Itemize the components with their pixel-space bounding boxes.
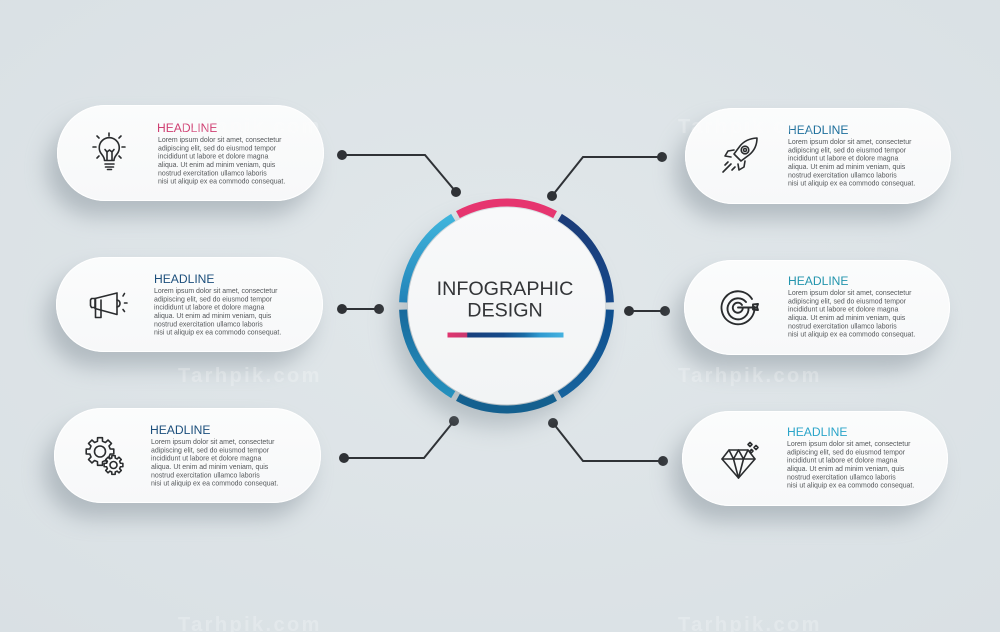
panel: diamond card	[672, 411, 948, 521]
watermarks: Tarhpik.com	[678, 365, 822, 387]
icon: target	[722, 291, 758, 324]
body text: aliqua. Ut enim ad minim veniam, quis	[151, 464, 269, 471]
body text: nostrud exercitation ullamco laboris	[151, 472, 260, 479]
body text: nostrud exercitation ullamco laboris	[787, 474, 896, 481]
icon: diamond	[722, 442, 758, 478]
body text: adipiscing elit, sed do eiusmod tempor	[788, 147, 907, 154]
panel: rocket card	[675, 108, 951, 219]
watermarks: Tarhpik.com	[678, 116, 822, 138]
body text: nostrud exercitation ullamco laboris	[154, 321, 263, 328]
body text: nostrud exercitation ullamco laboris	[788, 323, 897, 330]
body text	[788, 139, 915, 188]
body text: Lorem ipsum dolor sit amet, consectetur	[787, 441, 911, 448]
connector: middle right	[624, 306, 670, 316]
panel: gears card	[44, 408, 321, 518]
body text: adipiscing elit, sed do eiusmod tempor	[787, 449, 906, 456]
body text: Lorem ipsum dolor sit amet, consectetur	[154, 288, 278, 295]
panel: center circle	[393, 202, 610, 426]
panel: megaphone card	[46, 257, 323, 367]
body text: aliqua. Ut enim ad minim veniam, quis	[158, 162, 276, 169]
body text: adipiscing elit, sed do eiusmod tempor	[788, 298, 907, 305]
body text: Lorem ipsum dolor sit amet, consectetur	[788, 139, 912, 146]
center title: INFOGRAPHIC	[437, 278, 573, 300]
body text	[158, 137, 285, 186]
body text	[788, 290, 915, 339]
headline: HEADLINE	[150, 423, 210, 437]
body text: aliqua. Ut enim ad minim veniam, quis	[154, 313, 272, 320]
body text	[787, 441, 914, 490]
headline: HEADLINE	[157, 121, 218, 135]
body text: aliqua. Ut enim ad minim veniam, quis	[788, 164, 906, 171]
connector: bottom left	[339, 416, 459, 463]
body text: nostrud exercitation ullamco laboris	[158, 170, 267, 177]
body text: aliqua. Ut enim ad minim veniam, quis	[787, 466, 905, 473]
panel: target card	[674, 260, 950, 370]
connector: middle left	[337, 304, 384, 314]
ring segments	[403, 202, 610, 410]
body text: incididunt ut labore et dolore magna	[788, 156, 898, 163]
watermarks	[178, 116, 822, 632]
body text: nostrud exercitation ullamco laboris	[788, 172, 897, 179]
body text: adipiscing elit, sed do eiusmod tempor	[151, 447, 270, 454]
icon: rocket	[723, 138, 757, 172]
body text: nisi ut aliquip ex ea commodo consequat.	[158, 179, 285, 186]
body text: adipiscing elit, sed do eiusmod tempor	[154, 296, 273, 303]
body text: nisi ut aliquip ex ea commodo consequat.	[151, 481, 278, 488]
icon: light bulb	[93, 133, 125, 170]
headline: HEADLINE	[154, 272, 214, 286]
body text: Lorem ipsum dolor sit amet, consectetur	[158, 137, 282, 144]
center multicolor bar	[448, 332, 564, 338]
connector: top left	[337, 150, 461, 197]
connector: top right	[547, 152, 667, 201]
headline: HEADLINE	[788, 274, 848, 288]
body text: Lorem ipsum dolor sit amet, consectetur	[151, 439, 275, 446]
panel: center circle: DESIGN	[467, 300, 543, 322]
icon: gears	[86, 438, 123, 474]
connector: bottom right	[548, 418, 668, 466]
body text	[151, 439, 278, 488]
body text: nisi ut aliquip ex ea commodo consequat.	[788, 332, 915, 339]
panel: lightbulb card	[47, 105, 324, 216]
body text: nisi ut aliquip ex ea commodo consequat.	[154, 330, 281, 337]
body text: incididunt ut labore et dolore magna	[788, 307, 898, 314]
body text: incididunt ut labore et dolore magna	[158, 154, 268, 161]
body text: incididunt ut labore et dolore magna	[787, 458, 897, 465]
body text: nisi ut aliquip ex ea commodo consequat.	[788, 181, 915, 188]
icon: megaphone	[90, 293, 127, 318]
headline: HEADLINE	[787, 425, 848, 439]
body text: aliqua. Ut enim ad minim veniam, quis	[788, 315, 906, 322]
watermarks: Tarhpik.com	[178, 116, 322, 138]
body text: adipiscing elit, sed do eiusmod tempor	[158, 145, 277, 152]
body text: incididunt ut labore et dolore magna	[154, 305, 264, 312]
watermarks: Tarhpik.com	[178, 365, 322, 387]
headline: HEADLINE	[788, 123, 848, 137]
body text: Lorem ipsum dolor sit amet, consectetur	[788, 290, 912, 297]
body text: incididunt ut labore et dolore magna	[151, 456, 261, 463]
body text: nisi ut aliquip ex ea commodo consequat.	[787, 483, 914, 490]
body text	[154, 288, 281, 337]
